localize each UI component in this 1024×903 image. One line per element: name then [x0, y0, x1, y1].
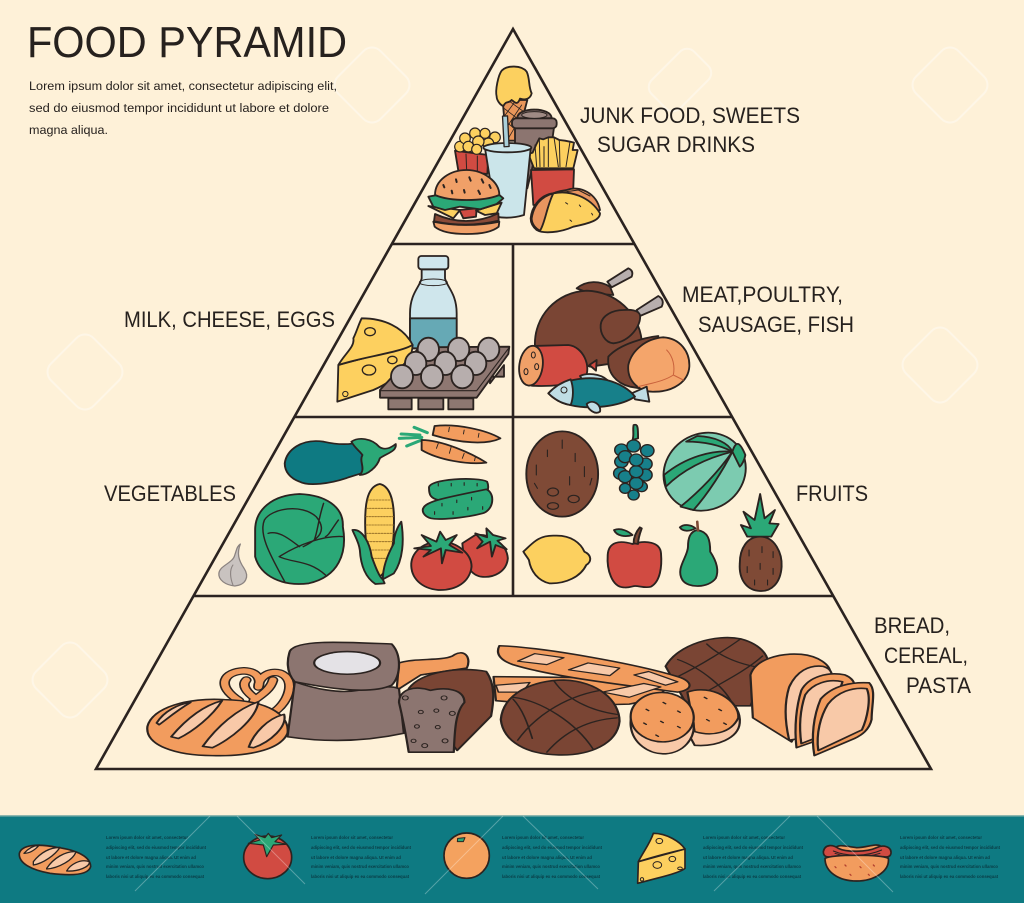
label: bread: [874, 613, 971, 698]
footer text column 3: Lorem ipsum dolor sit amet, consectetur: [502, 835, 584, 840]
icon: pineapple: [740, 494, 782, 591]
icon: orange: [444, 833, 489, 878]
panel: bread, cereal, pasta illustration: [147, 638, 873, 756]
icon: ice cream: [496, 67, 532, 141]
footer text column 4: laboris nisi ut aliquip ex ea commodo consequat: [703, 874, 801, 879]
icon: milk bottle: [410, 256, 457, 348]
footer text column 1: minim veniam, quis nostrud exercitation ullamco: [106, 864, 204, 869]
icon: cucumbers: [423, 479, 492, 519]
intro text block: magna aliqua.: [29, 123, 108, 137]
intro text block: [29, 79, 337, 137]
icon: egg tray: [380, 338, 509, 409]
footer text column 3: minim veniam, quis nostrud exercitation ullamco: [502, 864, 600, 869]
footer text column 5: Lorem ipsum dolor sit amet, consectetur: [900, 835, 982, 840]
icon: fries: [528, 137, 578, 205]
icon: tomato: [244, 833, 292, 879]
panel: junk food illustration: [428, 67, 600, 234]
footer text column 5: adipiscing elit, sed do eiusmod tempor incididunt: [900, 845, 1000, 850]
footer text column 5: minim veniam, quis nostrud exercitation ullamco: [900, 864, 998, 869]
title: FOOD PYRAMID: [27, 18, 347, 67]
label: fruits: FRUITS: [796, 481, 868, 506]
icon: roast turkey: [535, 268, 663, 367]
footer text column 1: ut labore et dolore magna aliqua. Ut enim ad: [106, 855, 196, 860]
icon: pear: [680, 522, 717, 586]
label: meat: [682, 282, 854, 337]
footer text column 2: [311, 835, 411, 879]
icon: coconut: [526, 431, 598, 517]
panel: vegetables illustration: [219, 425, 508, 590]
label: milk: MILK, CHEESE, EGGS: [124, 307, 335, 332]
footer text column 2: adipiscing elit, sed do eiusmod tempor incididunt: [311, 845, 411, 850]
footer text column 4: ut labore et dolore magna aliqua. Ut enim ad: [703, 855, 793, 860]
label: junk food: SUGAR DRINKS: [597, 132, 755, 157]
label: meat: MEAT,POULTRY,: [682, 282, 843, 307]
icon: watermelon: [648, 419, 761, 524]
icon: bread loaf: [19, 845, 91, 875]
icon: seeded loaf: [399, 670, 493, 752]
intro text block: sed do eiusmod tempor incididunt ut labore et dolore: [29, 101, 329, 115]
label: junk food: JUNK FOOD, SWEETS: [580, 103, 800, 128]
icon: long loaf front: [147, 699, 288, 756]
icon: cheese: [337, 318, 413, 402]
footer band: [0, 815, 1024, 903]
icon: popcorn: [455, 128, 500, 174]
icon: garlic: [219, 544, 247, 586]
pyramid outline: [96, 29, 931, 769]
footer text column 5: ut labore et dolore magna aliqua. Ut enim ad: [900, 855, 990, 860]
icon: flour sack: [288, 642, 404, 740]
icon: coffee cup: [512, 110, 557, 188]
footer text column 3: adipiscing elit, sed do eiusmod tempor incididunt: [502, 845, 602, 850]
icon: pretzel: [225, 671, 289, 711]
footer text column 4: adipiscing elit, sed do eiusmod tempor incididunt: [703, 845, 803, 850]
icon: ham: [608, 336, 689, 392]
icon: burger: [428, 170, 503, 234]
icon: buns: [627, 690, 740, 756]
label: junk food: [580, 103, 800, 157]
icon: eggplant: [285, 439, 396, 484]
panel: milk, cheese, eggs illustration: [337, 256, 509, 409]
footer text column 5: [900, 835, 1000, 879]
icon: sliced loaf: [750, 654, 873, 756]
label: bread: BREAD,: [874, 613, 950, 638]
icon: fish: [548, 374, 649, 413]
footer text column 4: [703, 835, 803, 879]
footer text column 2: Lorem ipsum dolor sit amet, consectetur: [311, 835, 393, 840]
icon: sausage: [517, 344, 597, 387]
icon: soda cup: [483, 116, 531, 218]
icon: croissant: [397, 653, 468, 690]
icon: baguettes: [494, 646, 690, 705]
footer text column 2: laboris nisi ut aliquip ex ea commodo consequat: [311, 874, 409, 879]
label: meat: SAUSAGE, FISH: [698, 312, 854, 337]
footer text column 1: Lorem ipsum dolor sit amet, consectetur: [106, 835, 188, 840]
icon: round loaf back: [666, 638, 768, 706]
icon: corn: [352, 484, 403, 584]
icon: cabbage: [255, 494, 344, 584]
footer text column 3: laboris nisi ut aliquip ex ea commodo consequat: [502, 874, 600, 879]
icon: tomatoes: [411, 528, 508, 590]
panel: meat, poultry, fish illustration: [517, 268, 689, 413]
icon: taco: [531, 189, 600, 232]
label: vegetables: VEGETABLES: [104, 481, 236, 506]
icon: apple: [608, 527, 661, 588]
footer text column 4: minim veniam, quis nostrud exercitation ullamco: [703, 864, 801, 869]
footer text column 2: ut labore et dolore magna aliqua. Ut enim ad: [311, 855, 401, 860]
panel: fruits illustration: [523, 419, 782, 591]
footer text column 3: ut labore et dolore magna aliqua. Ut enim ad: [502, 855, 592, 860]
footer text column 1: [106, 835, 206, 879]
footer text column 3: [502, 835, 602, 879]
icon: lemon: [523, 536, 590, 583]
footer text column 1: adipiscing elit, sed do eiusmod tempor incididunt: [106, 845, 206, 850]
footer text column 5: laboris nisi ut aliquip ex ea commodo consequat: [900, 874, 998, 879]
footer text column 4: Lorem ipsum dolor sit amet, consectetur: [703, 835, 785, 840]
label: bread: PASTA: [906, 673, 971, 698]
footer text column 2: minim veniam, quis nostrud exercitation ullamco: [311, 864, 409, 869]
icon: carrots: [399, 425, 500, 463]
icon: cheese wedge: [638, 833, 685, 883]
icon: grapes: [614, 425, 654, 500]
icon: hot dog: [823, 845, 891, 881]
label: bread: CEREAL,: [884, 643, 968, 668]
icon: round dark loaf: [501, 680, 620, 755]
footer text column 1: laboris nisi ut aliquip ex ea commodo consequat: [106, 874, 204, 879]
intro text block: Lorem ipsum dolor sit amet, consectetur adipiscing elit,: [29, 79, 337, 93]
